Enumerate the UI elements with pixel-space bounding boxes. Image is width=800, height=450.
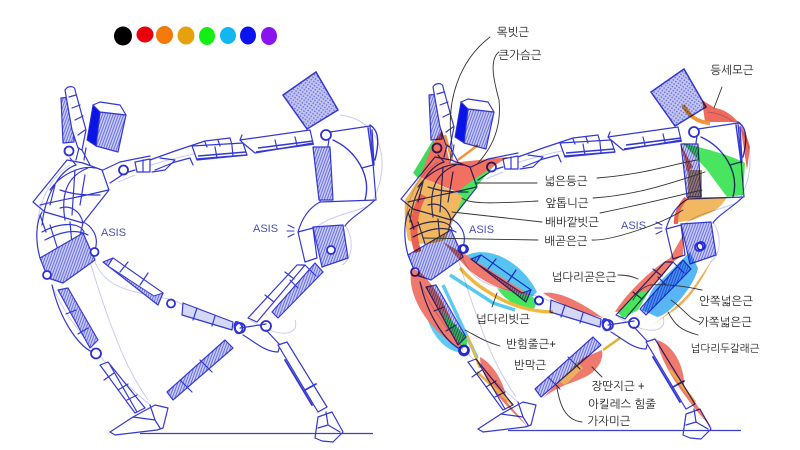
- tick marks: [287, 225, 294, 237]
- ankle joint: [235, 322, 243, 333]
- right torso: [298, 125, 378, 232]
- label: latissimus dorsi: 넓은등근: [544, 175, 588, 188]
- label: rectus femoris: 넙다리곧은근: [552, 271, 617, 284]
- label: trapezius: 등세모근: [710, 64, 754, 77]
- right head cube: [283, 72, 338, 129]
- ground line: [140, 432, 373, 434]
- figure: plain blue sketch: [33, 72, 382, 442]
- ASIS label: ASIS: [101, 227, 126, 239]
- head cube: [87, 102, 126, 152]
- outstretched arms: [103, 130, 314, 183]
- label: rectus abdominis: 배곧은근: [544, 235, 588, 248]
- raised arm: [61, 87, 90, 165]
- back leg muscles left figure: [411, 268, 528, 427]
- torso: [33, 160, 109, 258]
- torso muscles right figure: [673, 100, 750, 224]
- label: sartorius: 넙다리빗근: [476, 313, 530, 326]
- thigh muscles left figure: [443, 242, 603, 318]
- ASIS label right: ASIS: [253, 223, 278, 235]
- thigh muscles right figure: [603, 235, 712, 350]
- label: gastrocnemius: 장딴지근 +: [591, 380, 645, 393]
- front leg lower and foot: [278, 342, 343, 442]
- label: external oblique: 배바깥빗근: [545, 216, 599, 229]
- torso muscles left figure: [405, 130, 508, 252]
- colour swatches: [114, 26, 277, 46]
- pelvis joints: [43, 248, 98, 279]
- label: serratus anterior: 앞톱니근: [545, 197, 589, 210]
- front leg: [103, 258, 245, 400]
- label: vastus medialis: 안쪽넓은근: [699, 295, 753, 308]
- leader lines: [423, 37, 722, 422]
- label: semimembranosus: 반막근: [514, 359, 546, 372]
- label: sternocleidomastoid: 목빗근: [497, 26, 529, 39]
- calf muscles right figure: [543, 340, 712, 428]
- label: soleus: 가자미근: [587, 415, 631, 428]
- label: semitendinosus: 반힘줄근+: [506, 338, 556, 351]
- label: biceps femoris: 넙다리두갈래근: [690, 343, 760, 355]
- label: vastus lateralis: 가쪽넓은근: [698, 316, 752, 329]
- rear leg upper: [240, 263, 323, 352]
- label: pectoralis major: 큰가슴근: [498, 49, 542, 62]
- figure: muscle overlay base sketch: [401, 69, 750, 439]
- pelvis: [40, 233, 95, 283]
- joint circles on right panel: [460, 242, 705, 354]
- muscles: colour overlays: [405, 100, 750, 428]
- back leg: [52, 285, 168, 435]
- label: achilles tendon: 아킬레스 힘줄: [588, 398, 656, 411]
- right pelvis: [298, 225, 348, 267]
